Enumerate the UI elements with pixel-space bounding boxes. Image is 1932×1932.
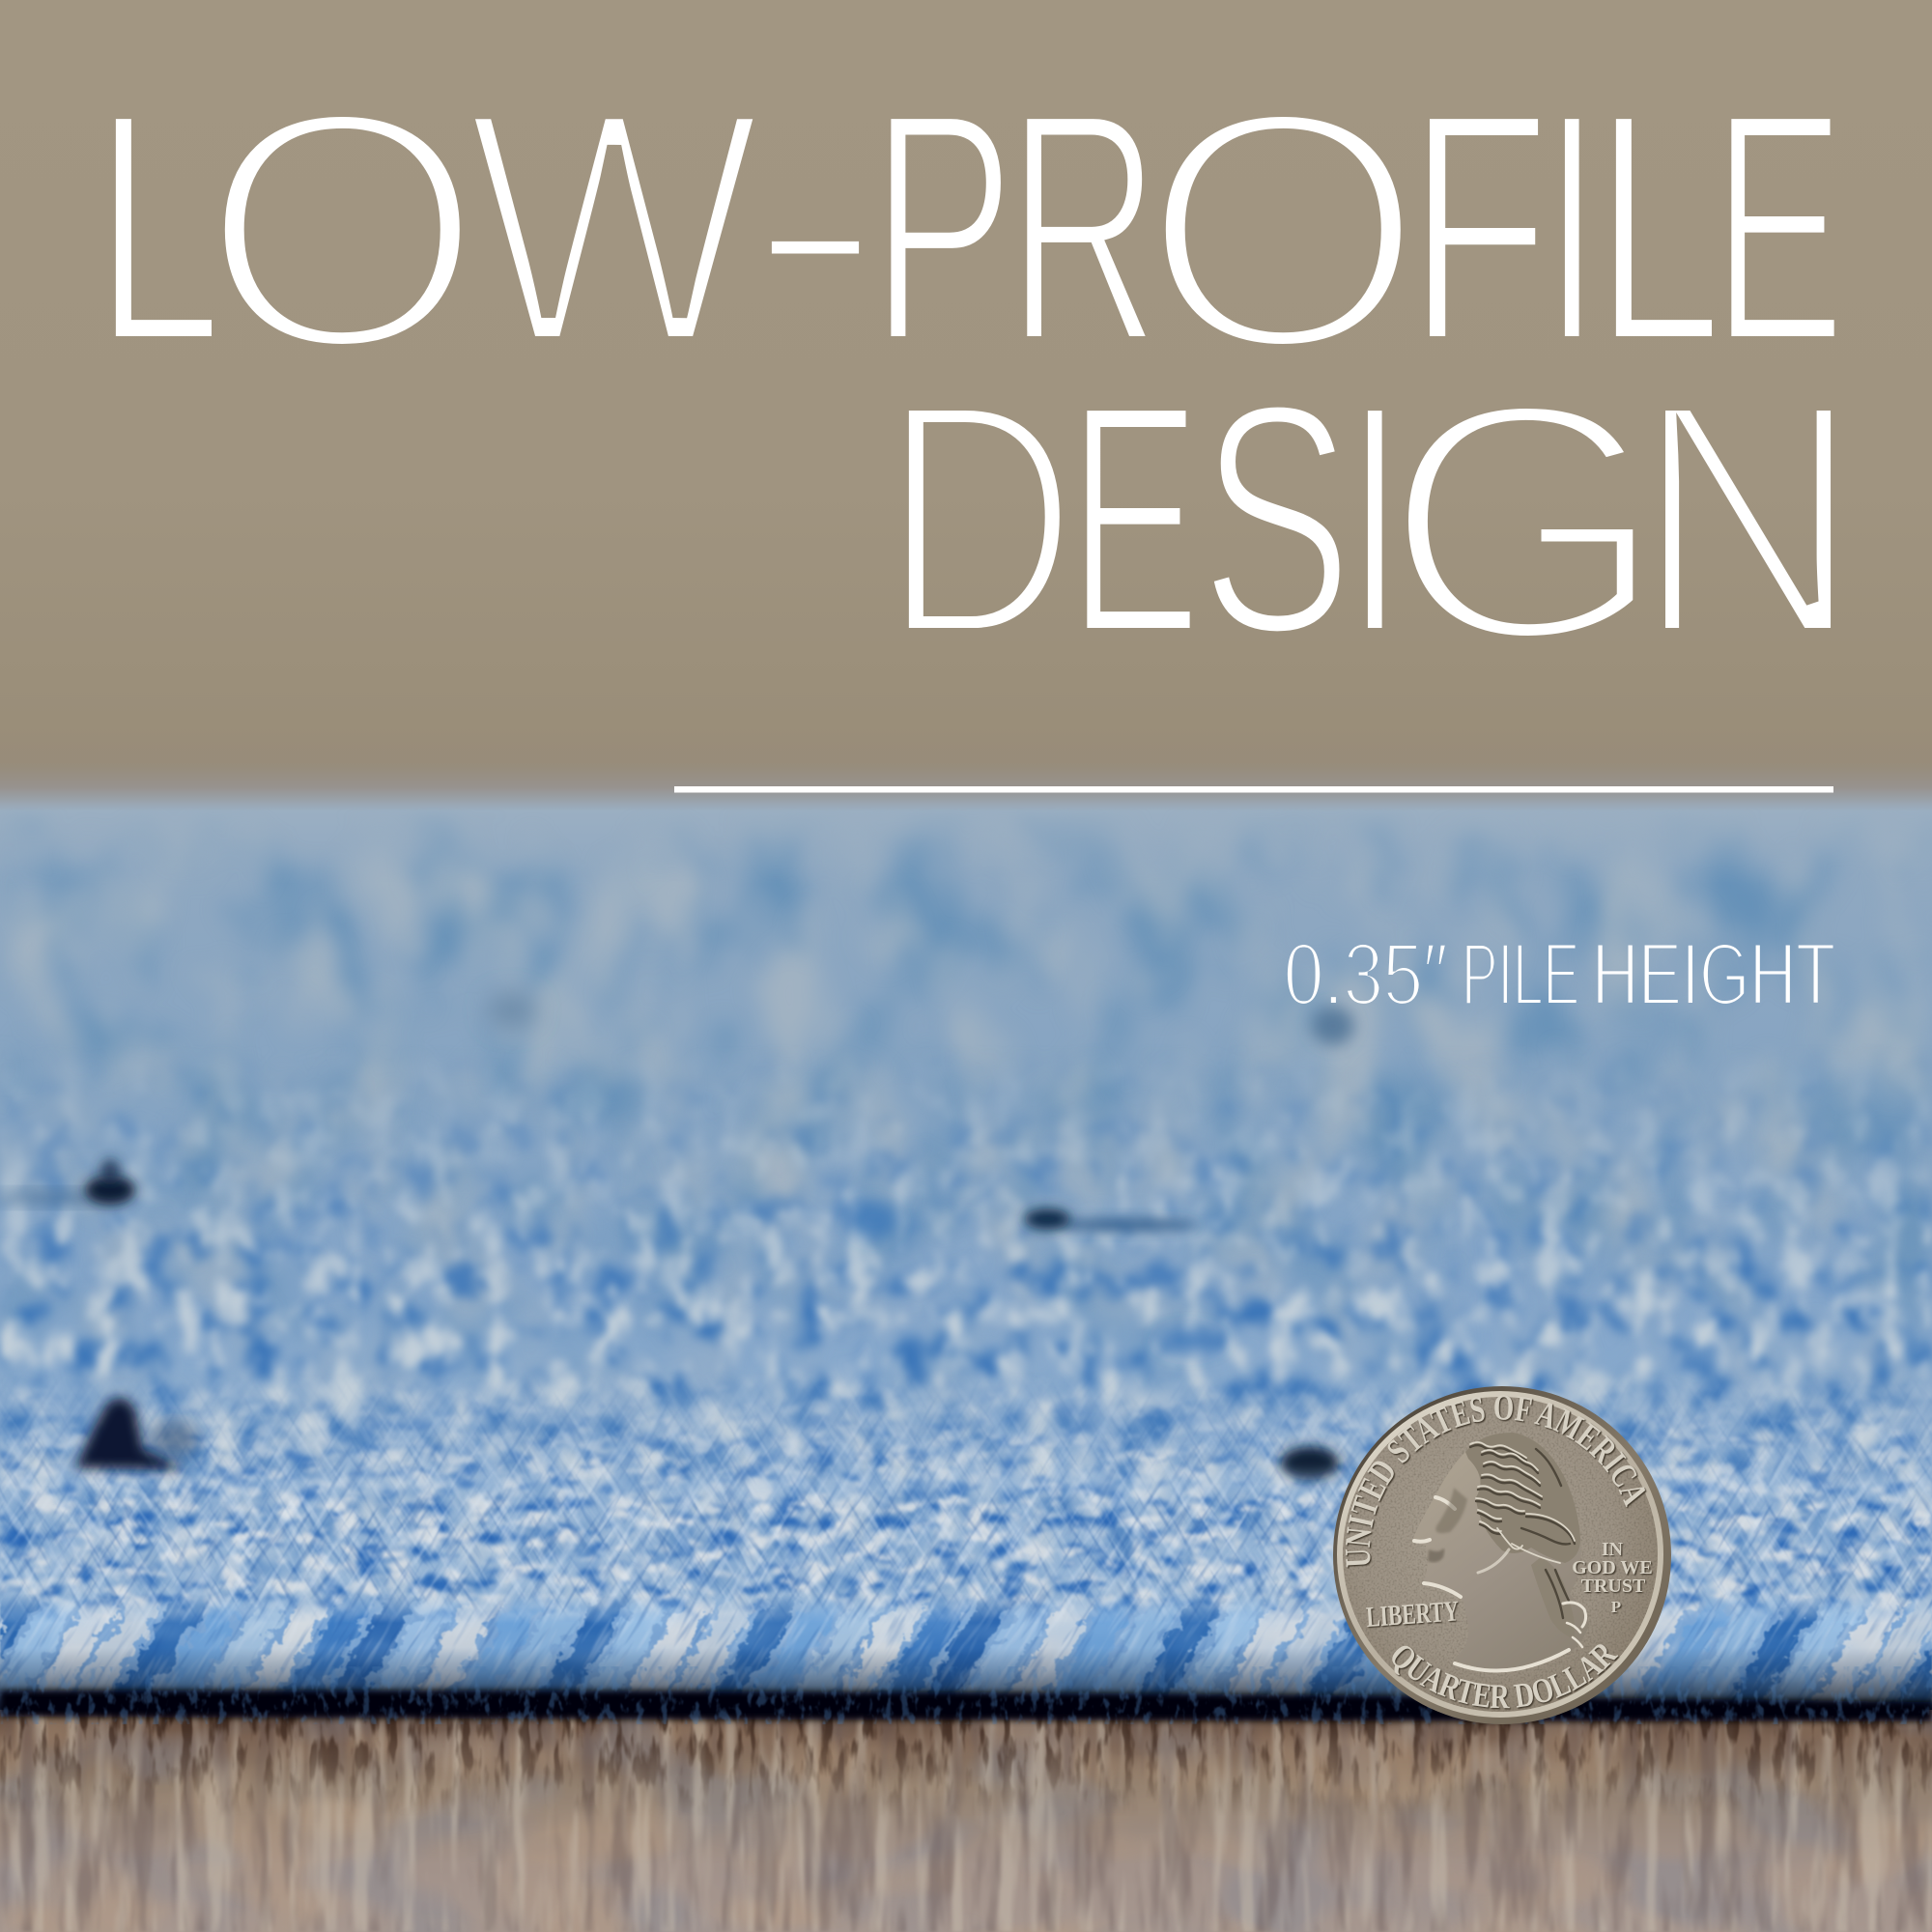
title line two: DESIGN: S — [1200, 336, 1352, 703]
text: UNITED STATES OF AMERICA: UNITED STATES OF AMERICA — [1345, 1396, 1647, 1569]
title line one: LOW-PROFILE: L — [94, 44, 222, 412]
title line one: LOW-PROFILE: - — [744, 39, 887, 406]
title line one: LOW-PROFILE: L — [1594, 44, 1722, 412]
title line one: LOW-PROFILE: E — [1713, 44, 1845, 412]
title line one: LOW-PROFILE: O — [1141, 39, 1426, 420]
coin portrait: George Washington — [1413, 1433, 1589, 1671]
text: IN GOD WE TRUST: IN — [1602, 1539, 1623, 1560]
text: mint mark P: P — [1611, 1598, 1621, 1616]
subheading: pile height: PILE — [1462, 925, 1579, 1024]
text: IN GOD WE TRUST: GOD WE — [1572, 1557, 1653, 1578]
subheading: pile height: HEIGHT — [1592, 925, 1835, 1024]
text: QUARTER DOLLAR: QUARTER DOLLAR — [1392, 1644, 1620, 1710]
coin lettering — [1345, 1396, 1654, 1710]
title line one: LOW-PROFILE: W — [464, 39, 766, 416]
icon: quarter dollar coin — [1333, 1386, 1671, 1724]
title line one: LOW-PROFILE: O — [200, 39, 485, 420]
title line two: DESIGN: I — [1346, 336, 1405, 703]
coin edge and rim — [1333, 1386, 1671, 1724]
background: beige wall — [0, 0, 1932, 802]
divider rule — [674, 786, 1833, 792]
photo: dark contact shadow under the rug — [0, 1666, 1932, 1721]
title line one: LOW-PROFILE: R — [1007, 44, 1160, 412]
subheading: pile height: 0.35″ — [1284, 925, 1448, 1024]
title — [94, 39, 1863, 712]
text: IN GOD WE TRUST: TRUST — [1581, 1576, 1646, 1597]
title line two: DESIGN: G — [1382, 330, 1668, 712]
photo: blue woven rug — [0, 763, 1932, 1739]
text: LIBERTY: LIBERTY — [1365, 1595, 1460, 1634]
photo: wooden floor — [0, 1710, 1932, 1932]
title line one: LOW-PROFILE: F — [1407, 44, 1550, 412]
title line two: DESIGN: E — [1068, 336, 1201, 703]
title line two: DESIGN: N — [1633, 331, 1863, 706]
title line two: DESIGN: D — [881, 331, 1078, 706]
title line one: LOW-PROFILE: P — [870, 44, 1015, 412]
title line one: LOW-PROFILE: I — [1543, 44, 1602, 412]
photo: twisted rope edge of the rug — [0, 1596, 1932, 1710]
